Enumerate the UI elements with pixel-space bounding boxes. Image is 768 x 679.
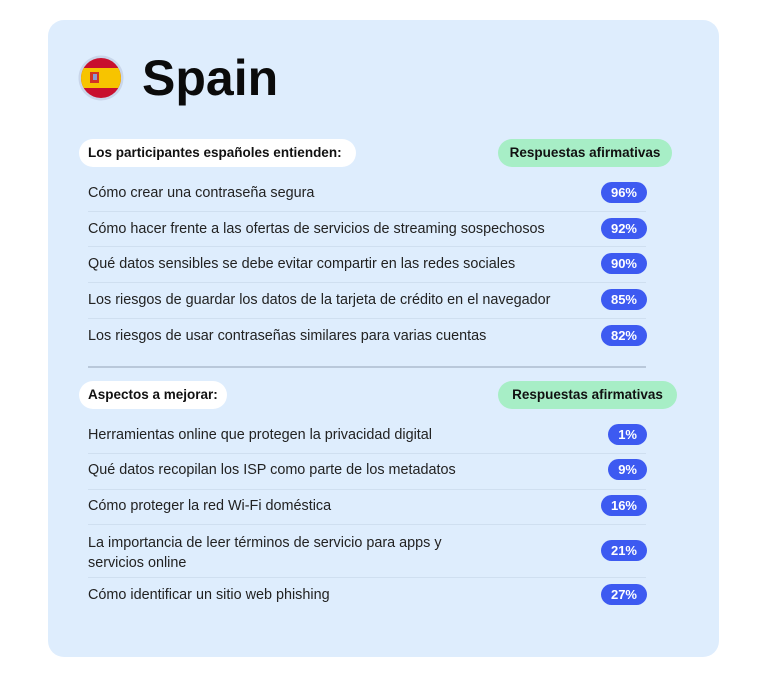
rows section 1: 85% bbox=[611, 292, 637, 307]
rows section 1: 82% bbox=[611, 328, 637, 343]
legend pill 1: Respuestas afirmativas bbox=[510, 145, 660, 160]
rows section 2: La importancia de leer términos de servicio para apps y bbox=[88, 535, 442, 551]
rows section 1: 96% bbox=[611, 185, 637, 200]
section header: understand bbox=[79, 139, 356, 167]
rows section 2 bbox=[88, 424, 647, 605]
legend pill 1 bbox=[498, 139, 672, 167]
icon: Spain flag bbox=[78, 56, 124, 100]
rows section 2: 9% bbox=[618, 462, 637, 477]
rows section 1: Qué datos sensibles se debe evitar compartir en las redes sociales bbox=[88, 256, 515, 272]
section header: improve: Aspectos a mejorar: bbox=[88, 387, 218, 402]
rows section 2: 27% bbox=[611, 587, 637, 602]
rows section 2: 16% bbox=[611, 498, 637, 513]
rows section 1: Cómo hacer frente a las ofertas de servicios de streaming sospechosos bbox=[88, 221, 545, 237]
section header: understand: Los participantes españoles entienden: bbox=[88, 145, 342, 160]
rows section 1: 90% bbox=[611, 256, 637, 271]
rows section 2: Qué datos recopilan los ISP como parte de los metadatos bbox=[88, 462, 456, 478]
rows section 1 bbox=[88, 182, 647, 346]
rows section 2: 21% bbox=[611, 543, 637, 558]
rows section 2: 1% bbox=[618, 427, 637, 442]
legend pill 2 bbox=[498, 381, 677, 409]
legend pill 2: Respuestas afirmativas bbox=[512, 387, 663, 402]
title: Spain bbox=[142, 50, 278, 106]
rows section 2: Cómo proteger la red Wi-Fi doméstica bbox=[88, 498, 331, 514]
rows section 2: Herramientas online que protegen la privacidad digital bbox=[88, 427, 432, 443]
rows section 1: Los riesgos de guardar los datos de la tarjeta de crédito en el navegador bbox=[88, 292, 550, 308]
rows section 1: Cómo crear una contraseña segura bbox=[88, 185, 314, 201]
rows section 1: 92% bbox=[611, 221, 637, 236]
rows section 2: servicios online bbox=[88, 555, 186, 571]
rows section 1: Los riesgos de usar contraseñas similares para varias cuentas bbox=[88, 328, 486, 344]
rows section 2: Cómo identificar un sitio web phishing bbox=[88, 587, 330, 603]
section header: improve bbox=[79, 381, 227, 409]
